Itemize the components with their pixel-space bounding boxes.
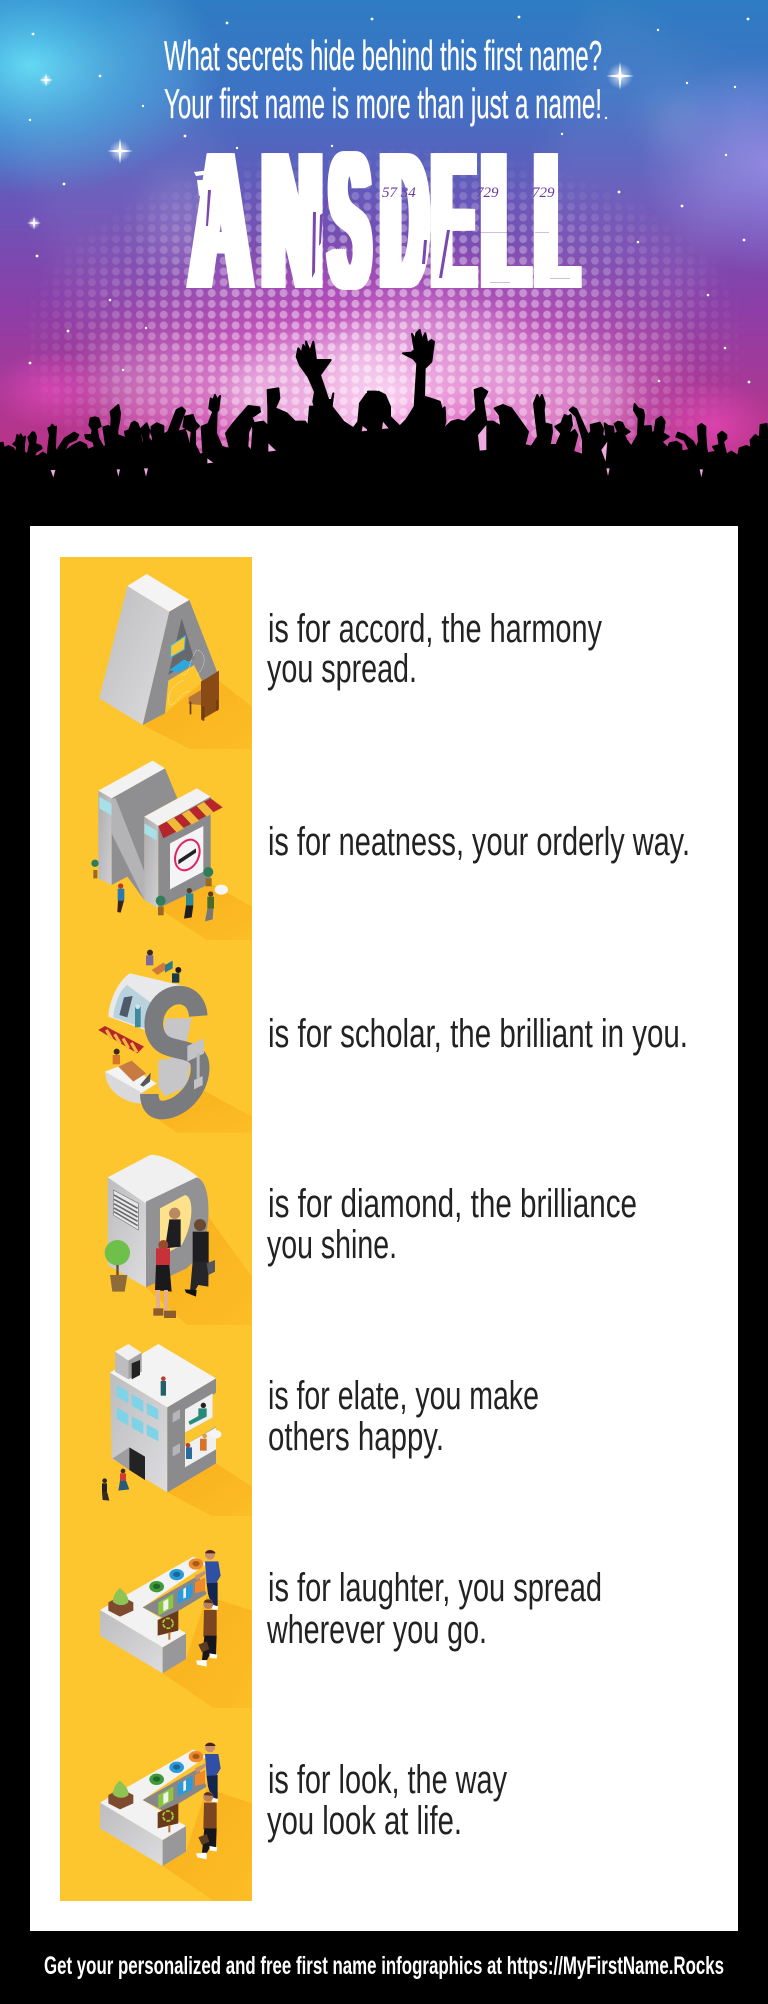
row text: A [267,607,602,691]
row text: L laughter: is for laughter, you spread [268,1566,602,1610]
row text: L look [267,1758,507,1843]
row text: D: is for diamond, the brilliance [268,1182,637,1226]
icon: isometric letter N [91,761,252,940]
row text: L look: you look at life. [267,1799,462,1843]
row text: E [268,1374,539,1459]
name heading: ANSDELL: A [191,111,250,330]
title question text [164,32,602,127]
row text: D [267,1182,637,1267]
row text: E: others happy. [268,1415,444,1459]
white content panel [30,526,738,1931]
name heading: ANSDELL [186,111,582,330]
icon: isometric letter L (lower) [100,1742,252,1901]
distressed texture on name: 729 [532,185,555,201]
icon: isometric letter E [102,1344,252,1516]
name heading: ANSDELL: N [263,111,321,330]
illustrated letter column [91,574,252,1901]
distressed texture on name: 729 [476,185,499,201]
header concert background [0,0,768,456]
distressed texture on name [194,170,570,283]
row text: L look: is for look, the way [268,1758,507,1802]
crowd silhouette [0,330,768,530]
sparkles and stars [27,16,750,383]
name heading: ANSDELL: E [433,111,474,330]
icon: isometric letter D [105,1155,252,1325]
row text: E: is for elate, you make [268,1374,539,1418]
name heading: ANSDELL: L [484,111,527,330]
name heading: ANSDELL: D [382,111,427,330]
row text: L laughter [266,1566,602,1652]
icon: isometric letter S [98,950,252,1133]
row text: D: you shine. [267,1223,397,1267]
icon: isometric letter L (upper) [100,1550,252,1708]
row text: A: you spread. [267,647,417,691]
name heading: ANSDELL: L [537,111,576,330]
row text: A: is for accord, the harmony [268,607,602,651]
yellow illustration column [60,557,252,1901]
row text: L laughter: wherever you go. [266,1608,487,1652]
icon: isometric letter A [99,574,252,749]
name heading: ANSDELL: S [330,111,369,330]
distressed texture on name: 57 34 [382,185,416,201]
